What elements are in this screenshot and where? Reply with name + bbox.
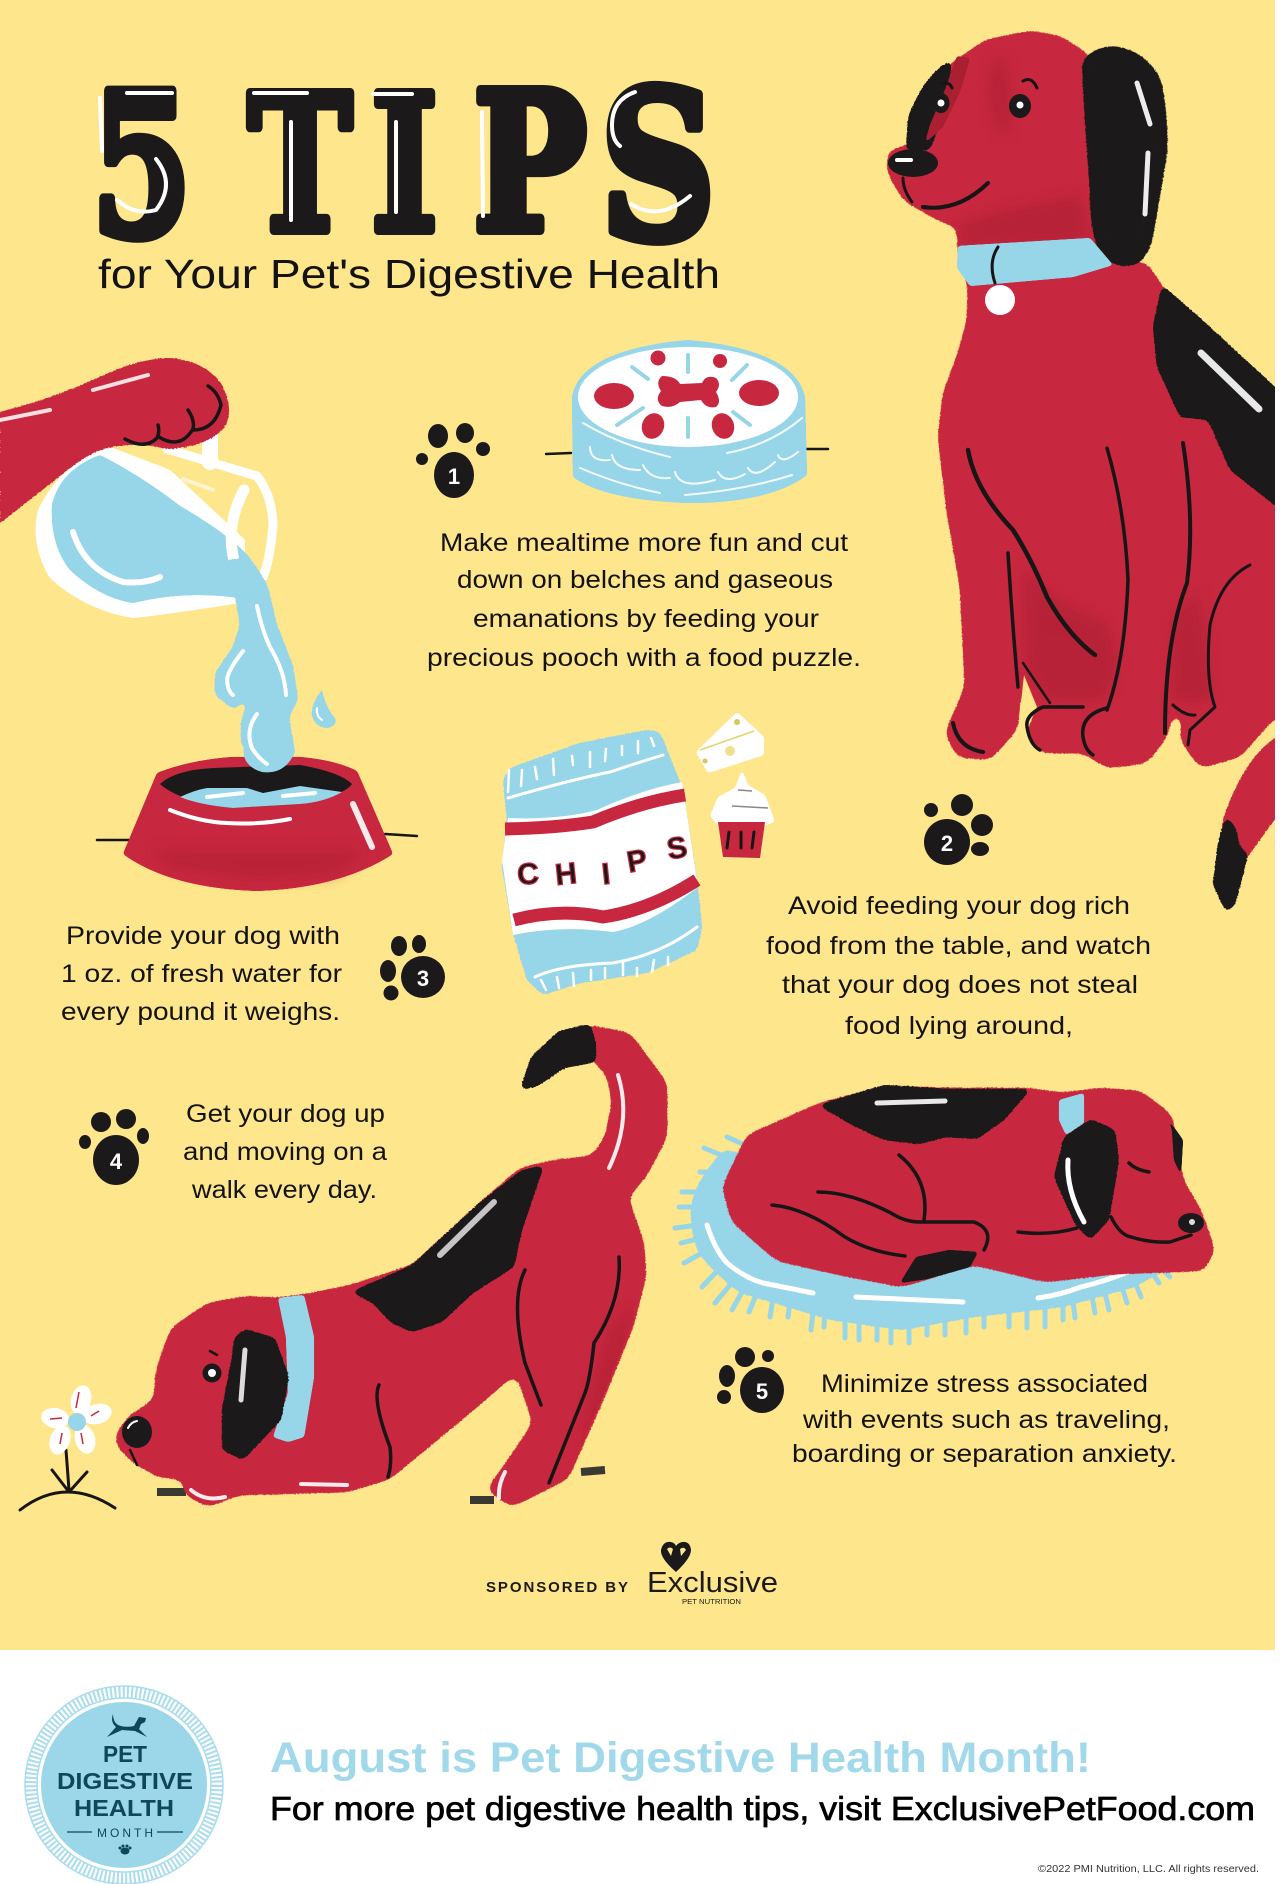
nose xyxy=(888,149,938,177)
footer call to action: For more pet digestive health tips, visit ExclusivePetFood.com xyxy=(270,1790,1255,1827)
far ear xyxy=(906,60,952,150)
subtitle: for Your Pet's Digestive Health xyxy=(98,251,720,297)
collar xyxy=(1059,1093,1084,1135)
ground marks xyxy=(157,1470,605,1500)
flower xyxy=(20,1383,115,1510)
sponsor logo: Exclusive xyxy=(647,1567,778,1599)
sponsor logo xyxy=(486,1542,778,1606)
tip 5 text: boarding or separation anxiety. xyxy=(792,1440,1177,1468)
collar xyxy=(957,238,1113,286)
tip 2 paw icon xyxy=(924,794,993,865)
leg gap xyxy=(1019,675,1037,722)
puzzle top xyxy=(578,347,798,447)
arm highlights xyxy=(0,375,148,420)
footer heading: August is Pet Digestive Health Month! xyxy=(270,1734,1091,1782)
tip 1 text: down on belches and gaseous xyxy=(457,566,833,594)
badge dog icon xyxy=(107,1714,147,1737)
paw knuckle lines xyxy=(125,386,221,444)
tip 1 text: emanations by feeding your xyxy=(473,605,819,633)
tip 5 text xyxy=(792,1370,1177,1468)
water stream xyxy=(215,558,298,775)
badge: Pet Digestive Health Month: DIGESTIVE xyxy=(57,1768,193,1794)
chips label text: C xyxy=(516,857,540,892)
tip 2 paw icon: 2 xyxy=(941,831,953,856)
ground lines xyxy=(97,834,417,840)
tip 4 text xyxy=(183,1100,387,1204)
bag label xyxy=(502,782,698,935)
badge: Pet Digestive Health Month: MONTH xyxy=(97,1826,153,1840)
tip 4 text: Get your dog up xyxy=(186,1100,385,1128)
stream highlights xyxy=(227,606,286,695)
pitcher rim and spout xyxy=(167,436,273,580)
tip 2 text: food lying around, xyxy=(845,1012,1073,1040)
rug fringe xyxy=(675,1137,1170,1343)
title: 5 TIPS: S xyxy=(600,47,716,287)
arm xyxy=(0,358,229,530)
badge: Pet Digestive Health Month: PET xyxy=(103,1741,147,1767)
tip 3 paw icon: 3 xyxy=(417,966,429,991)
chips label text: P xyxy=(624,844,650,879)
pitcher white body xyxy=(36,445,245,618)
bag top and bottom seams xyxy=(508,755,697,977)
chips label text: I xyxy=(600,858,612,891)
eye xyxy=(202,1351,222,1382)
bowl opening xyxy=(160,765,352,808)
dog body xyxy=(887,31,1280,768)
tip 5 paw icon xyxy=(717,1347,784,1413)
tip 4 text: and moving on a xyxy=(183,1138,387,1166)
dog body xyxy=(116,1024,667,1507)
illustration: food puzzle bowl xyxy=(546,340,828,503)
back saddle xyxy=(1153,285,1280,525)
illustration: sleeping dog on rug xyxy=(675,1085,1215,1343)
ear xyxy=(1054,1119,1119,1240)
stream foot in bowl xyxy=(243,735,295,772)
bag red stripes xyxy=(505,795,697,920)
tip 4 paw icon xyxy=(79,1109,149,1185)
body shading xyxy=(957,50,1212,702)
tip 2 text: Avoid feeding your dog rich xyxy=(788,892,1130,920)
tip 4 paw icon: 4 xyxy=(110,1149,123,1174)
water in pitcher xyxy=(52,455,262,603)
title: 5 TIPS xyxy=(91,47,716,287)
leg shading xyxy=(586,1315,630,1432)
logo heart xyxy=(661,1542,691,1572)
sponsor logo: PET NUTRITION xyxy=(682,1599,741,1606)
tip 2 text: food from the table, and watch xyxy=(766,932,1151,960)
collar line and tag xyxy=(992,247,998,283)
lines and highlights xyxy=(130,1075,623,1498)
near ear xyxy=(1082,46,1167,266)
far ear xyxy=(155,1328,182,1400)
tip 3 text xyxy=(61,922,342,1026)
tip 5 text: Minimize stress associated xyxy=(821,1370,1148,1398)
sponsor logo: SPONSORED BY xyxy=(486,1579,628,1596)
sleeping dog body xyxy=(722,1086,1215,1287)
puzzle blue ticks xyxy=(617,355,750,437)
saddle xyxy=(351,1165,544,1332)
title: 5 TIPS: P xyxy=(473,51,587,276)
title: 5 TIPS: 5 xyxy=(91,49,192,282)
tip 3 text: 1 oz. of fresh water for xyxy=(61,960,342,988)
illustration: chips bag xyxy=(502,712,775,995)
ear highlights xyxy=(1137,83,1150,214)
tip 3 paw icon xyxy=(380,935,445,1000)
black foot xyxy=(900,1250,978,1283)
tip 3 text: Provide your dog with xyxy=(66,922,340,950)
dog tail (right edge) xyxy=(1213,730,1280,912)
title: 5 TIPS: T xyxy=(248,54,352,275)
tip 4 text: walk every day. xyxy=(191,1176,377,1204)
copyright: ©2022 PMI Nutrition, LLC. All rights reserved. xyxy=(1038,1863,1259,1875)
bowl water xyxy=(180,786,342,808)
puzzle outer xyxy=(572,340,807,503)
eye patch xyxy=(925,56,970,143)
chips label text: S xyxy=(664,831,690,866)
tip 1 text: precious pooch with a food puzzle. xyxy=(427,644,861,672)
illustration: main sitting dog xyxy=(887,31,1280,912)
tip 5 text: with events such as traveling, xyxy=(802,1406,1170,1434)
tip 2 text xyxy=(766,892,1151,1040)
tail tip xyxy=(520,1024,596,1090)
tip 5 paw icon: 5 xyxy=(756,1379,768,1404)
ear xyxy=(222,1329,289,1460)
nose xyxy=(122,1416,152,1448)
chips label text xyxy=(516,831,690,892)
bag xyxy=(502,730,702,995)
rug highlights xyxy=(707,1225,1132,1302)
white right margin xyxy=(1275,0,1280,1650)
saddle xyxy=(818,1085,1031,1144)
eyes xyxy=(932,93,1031,118)
far ear xyxy=(1166,1116,1183,1175)
collar xyxy=(273,1295,314,1442)
tip 1 paw icon: 1 xyxy=(448,464,460,489)
puzzle food pieces xyxy=(594,350,779,442)
water bowl xyxy=(123,757,393,891)
tip 1 text xyxy=(427,529,861,672)
bowl highlights xyxy=(170,793,315,824)
badge: Pet Digestive Health Month xyxy=(25,1686,223,1884)
rug xyxy=(691,1150,1175,1330)
cheese xyxy=(696,712,764,773)
badge paw xyxy=(118,1844,132,1854)
cupcake xyxy=(710,770,775,858)
tip 1 paw icon xyxy=(416,423,490,498)
illustration: bowing dog with flower xyxy=(20,1024,667,1510)
tip 2 text: that your dog does not steal xyxy=(782,971,1138,999)
saddle highlight xyxy=(1201,353,1259,409)
face and body lines xyxy=(772,1155,1191,1256)
chips label text: H xyxy=(554,857,579,892)
badge: Pet Digestive Health Month: HEALTH xyxy=(74,1795,174,1821)
tip 3 text: every pound it weighs. xyxy=(61,998,340,1026)
illustration: paw pouring water from pitcher xyxy=(0,358,417,891)
pitcher highlights xyxy=(73,532,160,582)
droplet xyxy=(312,690,336,728)
face and leg lines xyxy=(903,80,1250,755)
title: 5 TIPS: I xyxy=(371,54,438,275)
puzzle white decoration xyxy=(580,418,802,495)
nose xyxy=(1178,1213,1204,1233)
tip 1 text: Make mealtime more fun and cut xyxy=(440,529,848,557)
